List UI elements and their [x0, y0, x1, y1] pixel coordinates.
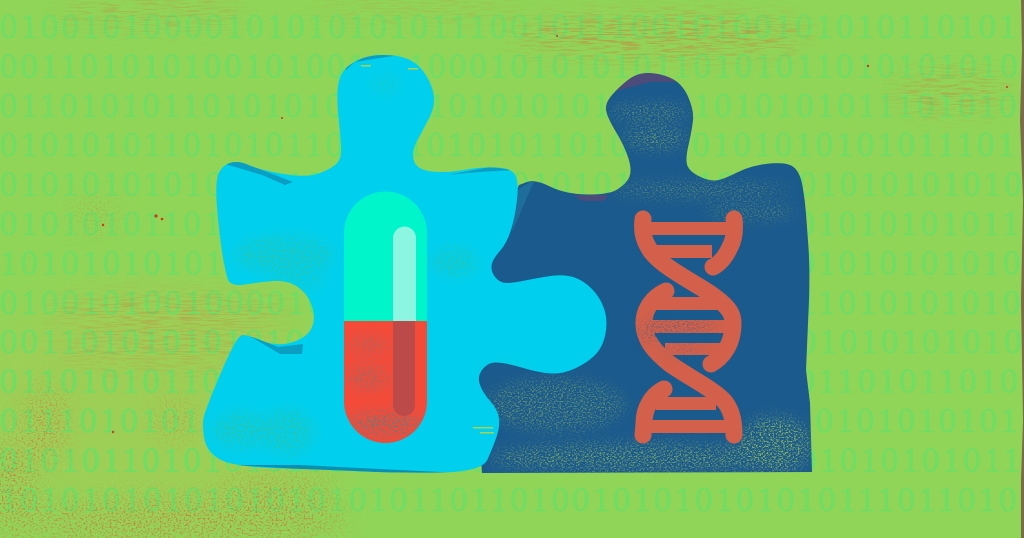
helix strands — [643, 219, 735, 435]
binary code background: 01001010010000101010101011010101010101011010101010 — [0, 283, 1023, 322]
capsule — [344, 191, 427, 443]
capsule highlight bottom — [393, 321, 415, 416]
gap shadow between knobs — [574, 195, 608, 201]
dark piece purple top — [616, 73, 676, 91]
capsule bottom half — [344, 321, 427, 443]
capsule speckle — [345, 337, 425, 436]
binary code background: 01001010000101010101011100101110010100101010110101 — [0, 7, 1020, 46]
red specks — [102, 35, 1008, 433]
binary code background: 01010110101010101010101010101010101010101010101011 — [0, 440, 1023, 479]
binary code background: 01010101101101010101010100101010101010101010101011 — [0, 204, 1022, 243]
binary code background: 01010101010110101010101010101010101010101010101010 — [0, 165, 1024, 204]
puzzle piece: dark blue with DNA — [470, 70, 812, 473]
dark piece lower-left shade — [512, 179, 535, 232]
binary code background: 10101010101010101010110110100101010101010111011010 — [0, 480, 1020, 519]
binary code background: 01010101101010110101101010110101010101010101011101 — [0, 125, 1018, 164]
binary code background: 00110101010101001010101010101010101010101010101010 — [0, 322, 1024, 361]
right edge strip — [1020, 0, 1024, 538]
DNA double helix — [636, 219, 738, 435]
rust speckle on background — [0, 203, 350, 538]
cyan piece shading and green texture — [212, 55, 533, 474]
helix rungs — [645, 222, 726, 433]
rust streaks on background — [50, 0, 1010, 370]
binary code background: 01101010110101010101010100101010101010101101011010 — [0, 362, 1021, 401]
binary code background: 10101010101010101010101011010101010101101010101010 — [0, 243, 1023, 282]
binary code background: 01110101011010101010101011010101010101010101010101 — [0, 401, 1021, 440]
dark piece shape — [470, 73, 812, 473]
cyan piece shape — [203, 55, 606, 473]
binary code background: 01101010110101010101010101010110101010101011101010 — [0, 86, 1020, 125]
binary code background: 00110101010010100101100010101010110101011010101010 — [0, 46, 1021, 85]
capsule top half — [344, 191, 427, 321]
dark piece scratches — [485, 70, 811, 473]
capsule highlight top — [393, 226, 416, 321]
yellow scratches — [361, 65, 494, 434]
lower-left background tint — [0, 285, 350, 515]
DNA speckle — [636, 320, 716, 353]
puzzle piece: cyan with capsule — [203, 55, 606, 474]
